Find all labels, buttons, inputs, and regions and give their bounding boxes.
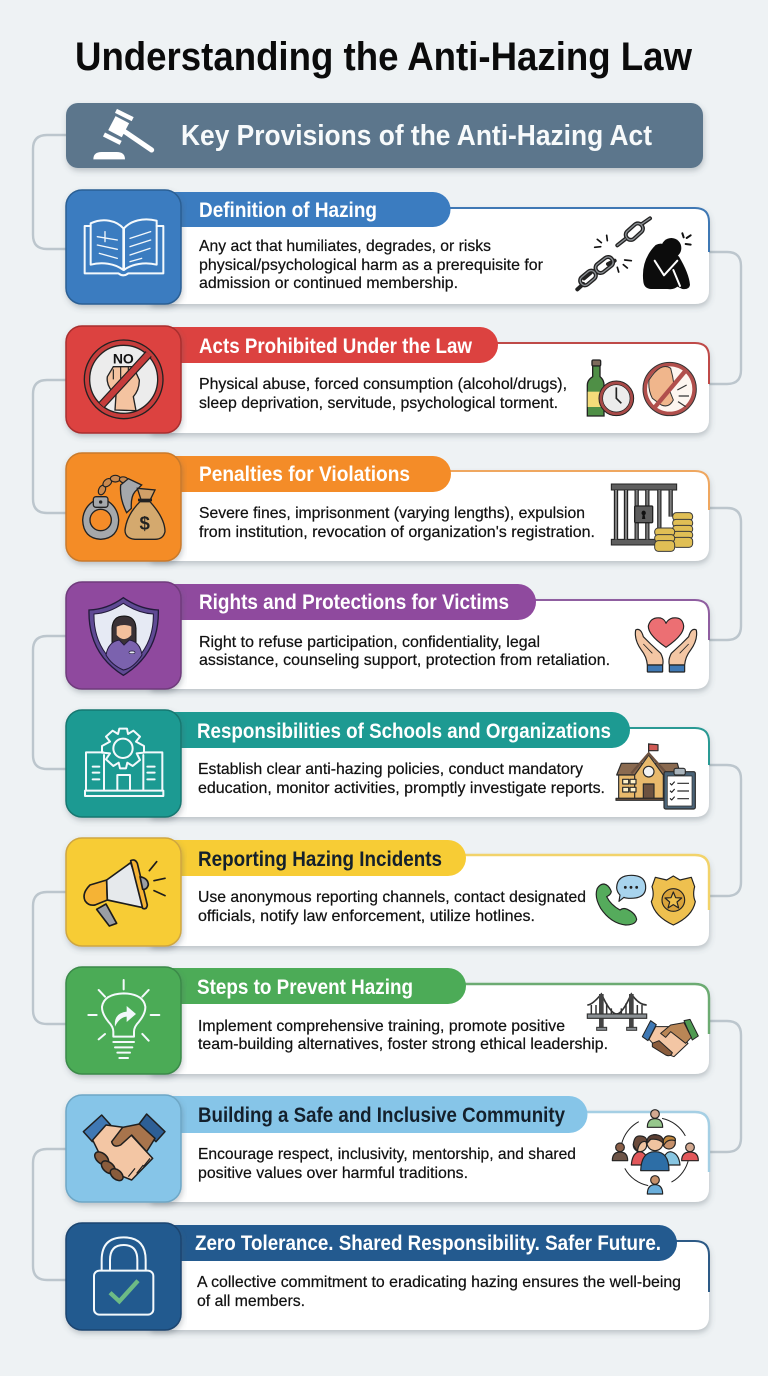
description <box>199 238 544 292</box>
panel: prevention steps <box>66 967 709 1074</box>
description: Severe fines, imprisonment (varying lengths), expulsion <box>199 505 585 522</box>
connector: responsibilities to reporting <box>708 765 741 896</box>
description: Any act that humiliates, degrades, or risks <box>199 238 491 255</box>
icon: jail bars and coins <box>611 484 693 551</box>
heading: Penalties for Violations <box>199 463 410 486</box>
heading: Steps to Prevent Hazing <box>197 976 413 999</box>
description: sleep deprivation, servitude, psychological torment. <box>199 395 558 412</box>
connector: reporting to prevention <box>33 892 68 1024</box>
panel: zero tolerance <box>66 1223 709 1330</box>
panel: responsibilities <box>66 710 709 817</box>
icon: no fist sign <box>84 339 164 419</box>
heading: Zero Tolerance. Shared Responsibility. Safer Future. <box>195 1232 661 1255</box>
icon: handcuffs and money bag: $ <box>139 512 150 533</box>
description: physical/psychological harm as a prerequisite for <box>199 257 544 274</box>
icon: handcuffs and money bag <box>83 475 165 539</box>
description: officials, notify law enforcement, utilize hotlines. <box>198 908 535 925</box>
heading: Rights and Protections for Victims <box>199 591 509 614</box>
connector: header to definition <box>33 135 68 249</box>
panel: acts prohibited <box>66 326 709 433</box>
icon: padlock with check <box>94 1237 153 1315</box>
description: team-building alternatives, foster strong ethical leadership. <box>198 1036 608 1053</box>
panel: rights and protections <box>66 582 709 689</box>
description: education, monitor activities, promptly investigate reports. <box>198 780 605 797</box>
icon: gavel <box>93 113 152 159</box>
title: Understanding the Anti-Hazing Law <box>75 35 693 79</box>
icon: bridge and handshake <box>587 994 698 1057</box>
description: Right to refuse participation, confidentiality, legal <box>199 634 540 651</box>
panel: reporting <box>66 838 709 946</box>
icon: open book <box>85 219 163 275</box>
panel: safe and inclusive community <box>66 1095 709 1202</box>
description <box>198 1146 576 1182</box>
description: Physical abuse, forced consumption (alcohol/drugs), <box>199 376 567 393</box>
heading: Acts Prohibited Under the Law <box>199 335 473 358</box>
heading: Responsibilities of Schools and Organizations <box>197 720 611 743</box>
heading: Definition of Hazing <box>199 199 377 222</box>
heading: Reporting Hazing Incidents <box>198 848 442 871</box>
connector: prohibited acts to penalties <box>33 380 68 513</box>
description: Implement comprehensive training, promote positive <box>198 1018 565 1035</box>
panel: definition of hazing <box>66 190 709 304</box>
icon: hands holding heart <box>635 618 697 672</box>
connector: definition to prohibited acts <box>708 252 741 384</box>
description: Use anonymous reporting channels, contact designated <box>198 889 586 906</box>
icon: broken chain and distressed figure <box>577 218 691 289</box>
description: Encourage respect, inclusivity, mentorship, and shared <box>198 1146 576 1163</box>
description: positive values over harmful traditions. <box>198 1165 468 1182</box>
icon: gear and building <box>85 729 163 796</box>
description <box>199 634 610 669</box>
connector: penalties to rights <box>708 508 741 640</box>
description <box>199 505 595 541</box>
description: Establish clear anti-hazing policies, conduct mandatory <box>198 761 583 778</box>
icon: bottle, clock and no shouting <box>587 360 696 416</box>
description: A collective commitment to eradicating hazing ensures the well-being <box>197 1274 681 1291</box>
icon: handshake <box>83 1114 165 1183</box>
connector: rights to responsibilities <box>33 636 68 769</box>
description: from institution, revocation of organization's registration. <box>199 524 595 541</box>
icon: light bulb with arrow <box>88 980 159 1058</box>
description <box>198 761 605 797</box>
description <box>198 1018 608 1053</box>
header text: Key Provisions of the Anti-Hazing Act <box>181 120 652 152</box>
icon: megaphone <box>84 860 165 926</box>
description: assistance, counseling support, protection from retaliation. <box>199 652 610 669</box>
icon: school and checklist <box>616 743 695 809</box>
icon: shield with person <box>89 598 158 675</box>
description <box>198 889 586 925</box>
connector: prevention to community <box>708 1021 741 1152</box>
description: admission or continued membership. <box>199 275 458 292</box>
icon: community circle <box>612 1110 698 1194</box>
icon: no fist sign: NO <box>113 350 134 366</box>
panel: penalties <box>66 453 709 561</box>
description <box>197 1274 681 1310</box>
description: of all members. <box>197 1293 305 1310</box>
header banner <box>66 103 703 168</box>
heading: Building a Safe and Inclusive Community <box>198 1104 565 1127</box>
icon: phone, speech bubble and badge <box>596 875 695 925</box>
connector: community to commitment <box>33 1149 68 1280</box>
description <box>199 376 567 412</box>
